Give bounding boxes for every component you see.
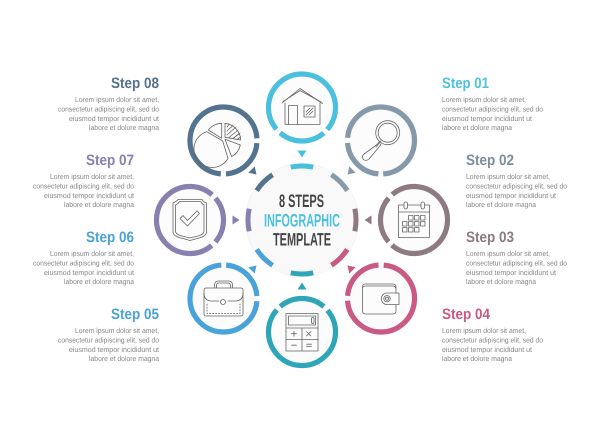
icon: house bbox=[282, 88, 322, 124]
text: step 6 bbox=[33, 229, 135, 286]
text: step 8: eiusmod tempor incididunt ut bbox=[69, 114, 159, 123]
text: step 3: Lorem ipsum dolor sit amet, bbox=[466, 249, 550, 258]
text: step 6: labore et dolore magna bbox=[64, 277, 135, 286]
text: step 5: eiusmod tempor incididunt ut bbox=[69, 345, 159, 354]
text: step 6: consectetur adipiscing elit, sed do bbox=[33, 258, 134, 268]
central title: INFOGRAPHIC bbox=[264, 210, 340, 230]
text: step 3: consectetur adipiscing elit, sed do bbox=[466, 258, 567, 268]
text: step 1: eiusmod tempor incididunt ut bbox=[442, 114, 532, 123]
text: step 3 bbox=[466, 229, 567, 286]
text: step 1: consectetur adipiscing elit, sed do bbox=[442, 104, 543, 114]
text: step 7: labore et dolore magna bbox=[64, 200, 135, 209]
text: step 8: labore et dolore magna bbox=[89, 123, 160, 132]
ring: step 7 shield bbox=[143, 173, 237, 267]
text: step 4: Step 04 bbox=[442, 306, 491, 323]
ring: step 3 calendar bbox=[367, 173, 461, 267]
text: step 1: Step 01 bbox=[442, 75, 489, 92]
text: step 4: Lorem ipsum dolor sit amet, bbox=[442, 326, 526, 335]
text: step 8: Step 08 bbox=[111, 75, 159, 92]
text: step 8 bbox=[58, 75, 160, 132]
central title: TEMPLATE bbox=[273, 230, 331, 250]
text: step 4: consectetur adipiscing elit, sed do bbox=[442, 336, 543, 344]
text: step 8: Lorem ipsum dolor sit amet, bbox=[75, 95, 159, 104]
text: step 6: Lorem ipsum dolor sit amet, bbox=[50, 249, 134, 258]
text: step 3: labore et dolore magna bbox=[466, 277, 537, 286]
central title: 8 STEPS bbox=[279, 191, 324, 211]
central circle bbox=[227, 145, 377, 295]
ring: step 8 pie chart bbox=[187, 104, 260, 177]
ring: step 5 calculator bbox=[255, 285, 349, 379]
text: step 5: Step 05 bbox=[111, 306, 159, 323]
text: step 5 bbox=[58, 306, 160, 363]
text: step 2: consectetur adipiscing elit, sed do bbox=[466, 182, 567, 190]
icon: briefcase bbox=[204, 281, 243, 316]
text: step 1: labore et dolore magna bbox=[442, 123, 513, 132]
text: step 4: labore et dolore magna bbox=[442, 354, 513, 363]
icon: magnifier bbox=[362, 121, 400, 160]
text: step 8: consectetur adipiscing elit, sed do bbox=[58, 104, 159, 114]
text: step 3: Step 03 bbox=[466, 229, 514, 246]
text: step 7: Lorem ipsum dolor sit amet, bbox=[50, 172, 134, 181]
text: step 5: Lorem ipsum dolor sit amet, bbox=[75, 326, 159, 335]
text: step 2 bbox=[466, 152, 567, 209]
text: step 4 bbox=[442, 306, 543, 363]
text: step 7: consectetur adipiscing elit, sed do bbox=[33, 182, 134, 190]
text: step 4: eiusmod tempor incididunt ut bbox=[442, 345, 532, 354]
ring: step 6 briefcase bbox=[187, 262, 260, 335]
icon: shield bbox=[173, 200, 206, 240]
arrows pointing to centre bbox=[232, 150, 372, 290]
text: step 6: eiusmod tempor incididunt ut bbox=[44, 268, 134, 277]
text: step 2: eiusmod tempor incididunt ut bbox=[466, 191, 556, 200]
icon: calculator bbox=[286, 314, 318, 351]
text: step 7 bbox=[33, 152, 135, 209]
text: step 1 bbox=[442, 75, 543, 132]
text: step 2: labore et dolore magna bbox=[466, 200, 537, 209]
ring: step 1 house bbox=[255, 60, 349, 155]
text: step 7: Step 07 bbox=[86, 152, 134, 169]
text: step 5: labore et dolore magna bbox=[89, 354, 160, 363]
central title bbox=[264, 191, 340, 250]
ring: step 2 magnifier bbox=[345, 104, 417, 177]
ring: step 4 wallet bbox=[345, 262, 417, 335]
text: step 2: Step 02 bbox=[466, 152, 514, 169]
text: step 5: consectetur adipiscing elit, sed do bbox=[58, 336, 159, 344]
icon: calendar bbox=[398, 202, 430, 238]
text: step 1: Lorem ipsum dolor sit amet, bbox=[442, 95, 526, 104]
text: step 7: eiusmod tempor incididunt ut bbox=[44, 191, 134, 200]
text: step 6: Step 06 bbox=[86, 229, 134, 246]
icon: pie chart bbox=[194, 123, 241, 167]
text: step 2: Lorem ipsum dolor sit amet, bbox=[466, 172, 550, 181]
icon: wallet bbox=[362, 284, 399, 314]
text: step 3: eiusmod tempor incididunt ut bbox=[466, 268, 556, 277]
